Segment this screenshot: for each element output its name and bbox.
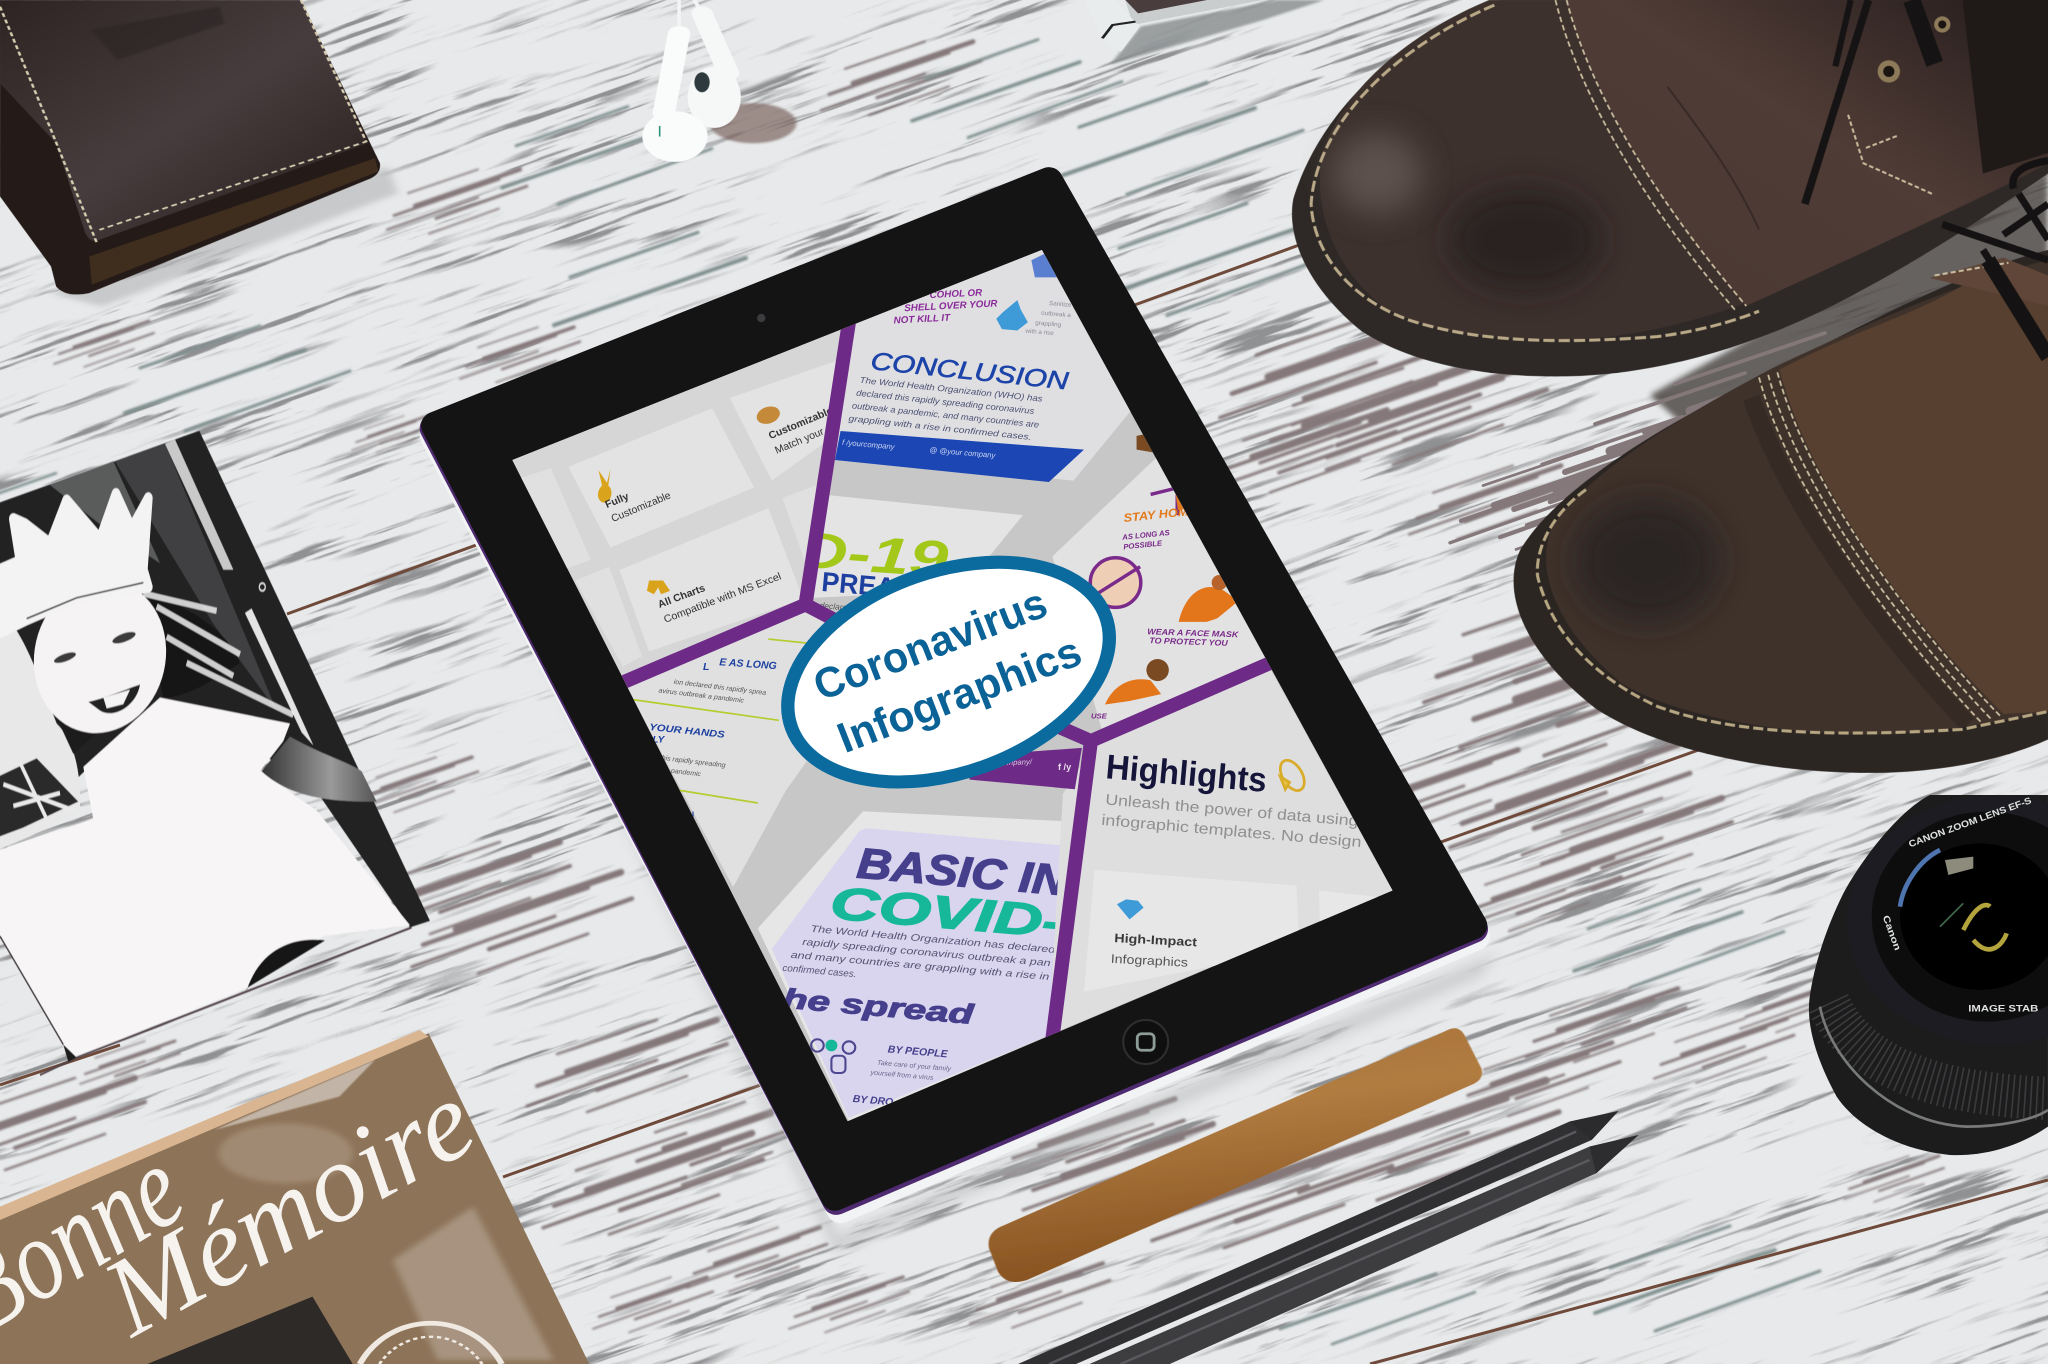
alcohol text: COHOL OR [929, 288, 982, 301]
text: Customizable: Match your [774, 426, 826, 457]
lens lettering [1881, 795, 2039, 1014]
panel: basic info: BY PEOPLE [887, 1044, 949, 1061]
icon: person with mask [1179, 587, 1238, 622]
icon: no touching [1090, 558, 1141, 607]
alcohol text [894, 289, 998, 324]
heading: highlights: Highlights [1104, 749, 1268, 800]
ribbed focus ring [1828, 1003, 2048, 1098]
earbuds [642, 0, 796, 162]
card text: Infographics [1110, 952, 1188, 970]
card text: High-Impact [1114, 931, 1198, 949]
arm [262, 737, 377, 802]
badge title [807, 579, 1088, 763]
small text [1026, 300, 1074, 335]
icons: people [811, 1039, 855, 1073]
hair [140, 589, 240, 698]
icon: victory hand [598, 469, 611, 503]
text: Fully Customizable: Customizable [610, 490, 673, 525]
icon: diamond [1117, 899, 1144, 919]
camera lens [1809, 795, 2048, 1155]
panel: hand washing tips [626, 612, 824, 887]
tablet metal edge [434, 184, 1476, 1209]
footer text: f /yourcompany [842, 438, 896, 451]
paragraph: grappling with a rise in confirmed cases. [848, 413, 1032, 442]
panel: hand washing tips: avirus outbreak a pandemic [658, 687, 745, 705]
paragraph [848, 374, 1044, 443]
wooden photo frame with script lettering [0, 1030, 589, 1364]
panel: basic info: BY DRO [852, 1094, 894, 1108]
panel: highlights [1049, 668, 1393, 1035]
icon: grid [1031, 253, 1059, 277]
panel: basic info: The World Health Organization has declared [810, 924, 1056, 956]
alcohol text: SHELL OVER YOUR [904, 298, 998, 314]
panel: basic info: Take care of your family [877, 1060, 952, 1073]
dress [0, 698, 410, 1058]
panel: basic info: and many countries are grappling with a rise in [790, 950, 1050, 983]
panel: conclusion [835, 250, 1147, 482]
small text: Sanitize your [1049, 300, 1086, 310]
panel: basic info [758, 811, 1073, 1121]
purple dividers: f /y [1058, 762, 1071, 772]
panel: basic info: yourself from a virus [869, 1070, 934, 1082]
frame lettering: Mémoire [82, 1057, 494, 1361]
frame window [147, 1297, 353, 1364]
footer text: @ @your company [929, 445, 997, 460]
lens lettering: Canon [1881, 914, 1903, 952]
icon: raised hands [647, 580, 670, 594]
face [21, 561, 179, 752]
badge: coronavirus infographics [757, 522, 1140, 823]
icon: shooting star [1278, 758, 1306, 792]
shoes [1292, 0, 2048, 773]
panel: prevention tips: POSSIBLE [1123, 538, 1163, 551]
panel: covid-19 spread: D-19 [796, 520, 951, 588]
panel: prevention tips: STAY HOME [1123, 503, 1199, 525]
small text: grappling [1035, 320, 1062, 329]
cigar [989, 1028, 1482, 1282]
panel: basic info: confirmed cases. [782, 963, 857, 980]
panel: basic info: rapidly spreading coronavirus outbreak a pan [802, 937, 1051, 969]
panel: hand washing tips: L [703, 662, 709, 673]
purple dividers [624, 322, 1270, 1039]
crown [0, 494, 148, 633]
icon: sanitizer bottle [996, 300, 1028, 330]
text: All Charts: All Charts [657, 583, 707, 611]
text: Customizable: Customizable [767, 406, 835, 442]
panel: prevention tips: AS LONG AS [1121, 528, 1170, 542]
highlights subtext [1101, 791, 1364, 851]
panel: hand washing tips: E AS LONG [719, 657, 777, 672]
shoe 1 [1292, 0, 2048, 376]
panel: hand washing tips: pandemic [669, 768, 702, 778]
card: high-impact [1084, 870, 1299, 992]
laces [1942, 161, 2048, 352]
panel: prevention tips [1052, 432, 1270, 729]
panel: feature cards [512, 322, 849, 680]
wallet [0, 0, 398, 306]
panel: covid-19 spread [814, 495, 1023, 610]
shoe 2 [1514, 161, 2048, 773]
tablet [434, 181, 1498, 1252]
cigar and pencils [989, 1028, 1639, 1364]
alcohol text: NOT KILL IT [893, 313, 951, 326]
panel: prevention tips: WEAR A FACE MASK [1147, 626, 1240, 639]
shadow [442, 453, 1498, 1252]
panel: hand washing tips: ion declared this rapidly sprea [673, 679, 767, 697]
panel: basic info: BASIC IN [855, 840, 1070, 905]
panel: hand washing tips: N [688, 810, 694, 820]
icon: palette [756, 406, 780, 424]
text: Fully Customizable: Fully [604, 491, 631, 511]
text: Customizable [768, 408, 828, 454]
panel: hand washing tips: this rapidly spreading [659, 755, 726, 769]
footer text [842, 440, 996, 460]
lens lettering: CANON ZOOM LENS EF-S [1907, 795, 2033, 849]
panel: prevention tips: TO PROTECT YOU [1149, 635, 1229, 648]
embossed logo [92, 7, 224, 60]
home button [1123, 1020, 1168, 1064]
small text: outbreak a [1041, 310, 1072, 319]
paragraph: declared this rapidly spreading coronavirus [856, 388, 1035, 416]
shadow between the shoes [1450, 170, 2048, 549]
paragraph: The World Health Organization (WHO) has [859, 375, 1044, 404]
highlights subtext: Unleash the power of data using [1105, 792, 1359, 830]
icon: person sneezing [1105, 679, 1161, 704]
purple dividers: mpany/ [1007, 757, 1033, 767]
paragraph: outbreak a pandemic, and many countries are [852, 400, 1040, 430]
small text: with a rise [1024, 328, 1055, 337]
panel: hand washing tips: LY [653, 734, 666, 745]
tablet black bezel [435, 181, 1473, 1197]
panel: covid-19 spread: declared [819, 600, 853, 613]
metal clasp [1084, 0, 1324, 65]
pencils [1018, 1111, 1639, 1364]
camera dot [757, 314, 765, 322]
panel: prevention tips: USE [1091, 711, 1108, 720]
panel: hand washing tips: YOUR HANDS [649, 722, 726, 741]
printed photo of smiling girl in crown [0, 431, 430, 1075]
badge title: Infographics [831, 628, 1088, 763]
panel: basic info: he spread [782, 983, 976, 1030]
laces [1805, 0, 1868, 204]
stamp [360, 1323, 502, 1364]
card text [1110, 931, 1198, 970]
tablet screen collage [512, 250, 1392, 1122]
highlights subtext: infographic templates. No design [1101, 812, 1362, 851]
lens lettering: IMAGE STAB [1968, 1004, 2039, 1014]
badge title: Coronavirus [807, 579, 1054, 710]
panel: basic info: COVID- [828, 877, 1067, 948]
heading: conclusion: CONCLUSION [869, 347, 1071, 395]
panel: covid-19 spread: PREA [820, 566, 896, 603]
text: All Charts: Compatible with MS Excel [662, 572, 783, 626]
